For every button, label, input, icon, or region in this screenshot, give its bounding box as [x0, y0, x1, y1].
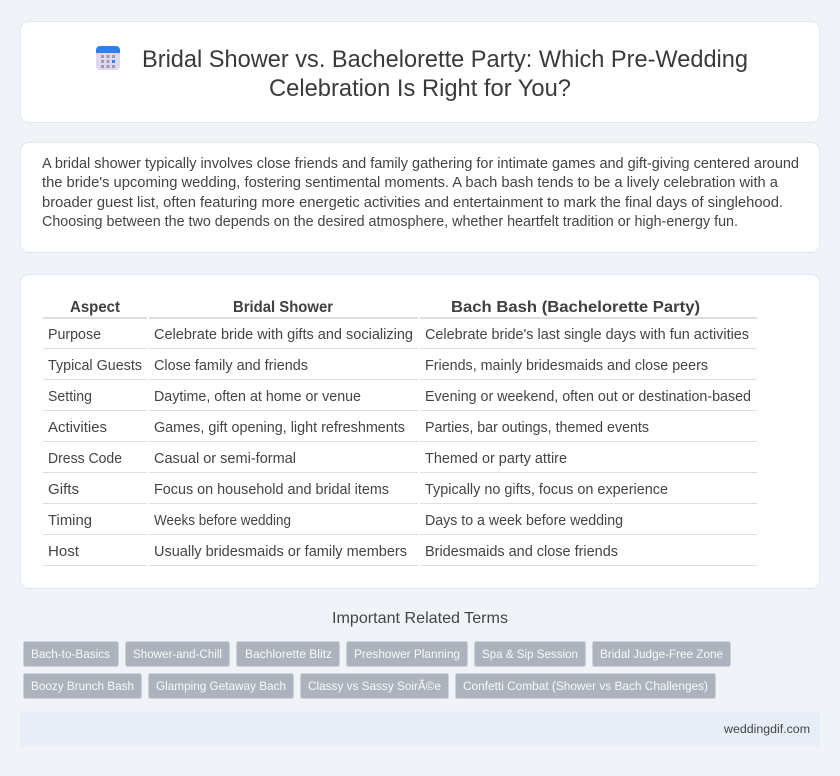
- tag: Preshower Planning: Preshower Planning: [354, 647, 460, 661]
- tag: Confetti Combat: Confetti Combat (Shower vs Bach Challenges): [463, 679, 708, 693]
- row: dress code: Dress Code: [48, 451, 122, 467]
- panel: introduction: [20, 142, 820, 252]
- row: timing: [48, 513, 623, 529]
- tag: Boozy Brunch Bash: [24, 674, 142, 698]
- tag: Bachlorette Blitz: Bachlorette Blitz: [245, 647, 332, 661]
- tag: Classy vs Sassy Soirée: Classy vs Sassy SoirÃ©e: [308, 679, 441, 693]
- table header: Aspect: [70, 299, 121, 316]
- row: host: Usually bridesmaids or family members: [154, 544, 407, 560]
- row: purpose: [48, 327, 749, 343]
- tag: Preshower Planning: [346, 642, 468, 666]
- row: host: Bridesmaids and close friends: [425, 544, 618, 560]
- row: gifts: [48, 482, 668, 498]
- table header: Bridal Shower: [233, 299, 333, 316]
- title: Bridal Shower vs. Bachelorette Party: Which Pre-Wedding: [142, 46, 748, 73]
- row: purpose: Purpose: [48, 327, 101, 343]
- title: Celebration Is Right for You?: [269, 75, 571, 102]
- tag: Shower-and-Chill: Shower-and-Chill: [133, 647, 222, 661]
- footer: weddingdif.com: [723, 722, 810, 736]
- row: gifts: Focus on household and bridal items: [154, 482, 389, 498]
- tag: Classy vs Sassy Soirée: [300, 674, 448, 698]
- tag: Glamping Getaway Bach: Glamping Getaway Bach: [156, 679, 286, 693]
- row: activities: Games, gift opening, light refreshments: [154, 420, 405, 436]
- row: timing: Timing: [48, 513, 92, 529]
- tag: Confetti Combat: [456, 674, 716, 698]
- tag: Spa & Sip Session: [474, 642, 586, 666]
- tag: Bach-to-Basics: Bach-to-Basics: [31, 647, 110, 661]
- row: activities: Activities: [48, 420, 107, 436]
- text block: introduction: A bridal shower typically involves close friends and family gathering for intimate games and gift-giving centered around: [42, 156, 799, 172]
- panel: comparison table: [20, 274, 820, 588]
- table header: [70, 299, 700, 316]
- row: purpose: Celebrate bride's last single days with fun activities: [425, 327, 749, 343]
- row: gifts: Gifts: [48, 482, 79, 498]
- row: typical guests: [48, 358, 708, 374]
- icon: calendar: [96, 46, 120, 70]
- row: host: Host: [48, 544, 79, 560]
- panel: header: [20, 22, 820, 122]
- row: dress code: Casual or semi-formal: [154, 451, 296, 467]
- row: setting: [48, 389, 751, 405]
- text block: introduction: [42, 156, 799, 230]
- row: setting: Daytime, often at home or venue: [154, 389, 361, 405]
- row: gifts: Typically no gifts, focus on experience: [425, 482, 668, 498]
- tag: Bridal Judge-Free Zone: Bridal Judge-Free Zone: [600, 647, 723, 661]
- tag: Bachlorette Blitz: [236, 642, 340, 666]
- row: typical guests: Typical Guests: [48, 358, 142, 374]
- tag: Glamping Getaway Bach: [148, 674, 294, 698]
- row: setting: Evening or weekend, often out or destination-based: [425, 389, 751, 405]
- tag: Spa & Sip Session: Spa & Sip Session: [482, 647, 578, 661]
- tag: Bridal Judge-Free Zone: [592, 642, 730, 666]
- row: dress code: [48, 451, 567, 467]
- text block: introduction: the bride's upcoming wedding, fostering sentimental moments. A bach bash tends to be a lively celebration with a: [42, 175, 778, 191]
- row: activities: [48, 420, 649, 436]
- row: setting: Setting: [48, 389, 92, 405]
- tag: Boozy Brunch Bash: Boozy Brunch Bash: [31, 679, 134, 693]
- table header: Bach Bash (Bachelorette Party): [451, 299, 700, 316]
- row: timing: Weeks before wedding: [154, 513, 291, 529]
- title: [142, 46, 748, 102]
- text block: introduction: Choosing between the two depends on the desired atmosphere, whether heartfelt tradition or high-energy fun.: [42, 214, 738, 230]
- row: timing: Days to a week before wedding: [425, 513, 623, 529]
- footer: [20, 712, 820, 746]
- row: activities: Parties, bar outings, themed events: [425, 420, 649, 436]
- heading: related terms: Important Related Terms: [332, 610, 508, 627]
- row: host: [48, 544, 618, 560]
- row: typical guests: Friends, mainly bridesmaids and close peers: [425, 358, 708, 374]
- row: dress code: Themed or party attire: [425, 451, 567, 467]
- tag: Shower-and-Chill: [126, 642, 230, 666]
- text block: introduction: broader guest list, often featuring more energetic activities and entertainment to mark the final days of singlehood.: [42, 195, 783, 211]
- row: typical guests: Close family and friends: [154, 358, 308, 374]
- row: purpose: Celebrate bride with gifts and socializing: [154, 327, 413, 343]
- tag: Bach-to-Basics: [24, 642, 118, 666]
- tags: related terms: [24, 642, 730, 698]
